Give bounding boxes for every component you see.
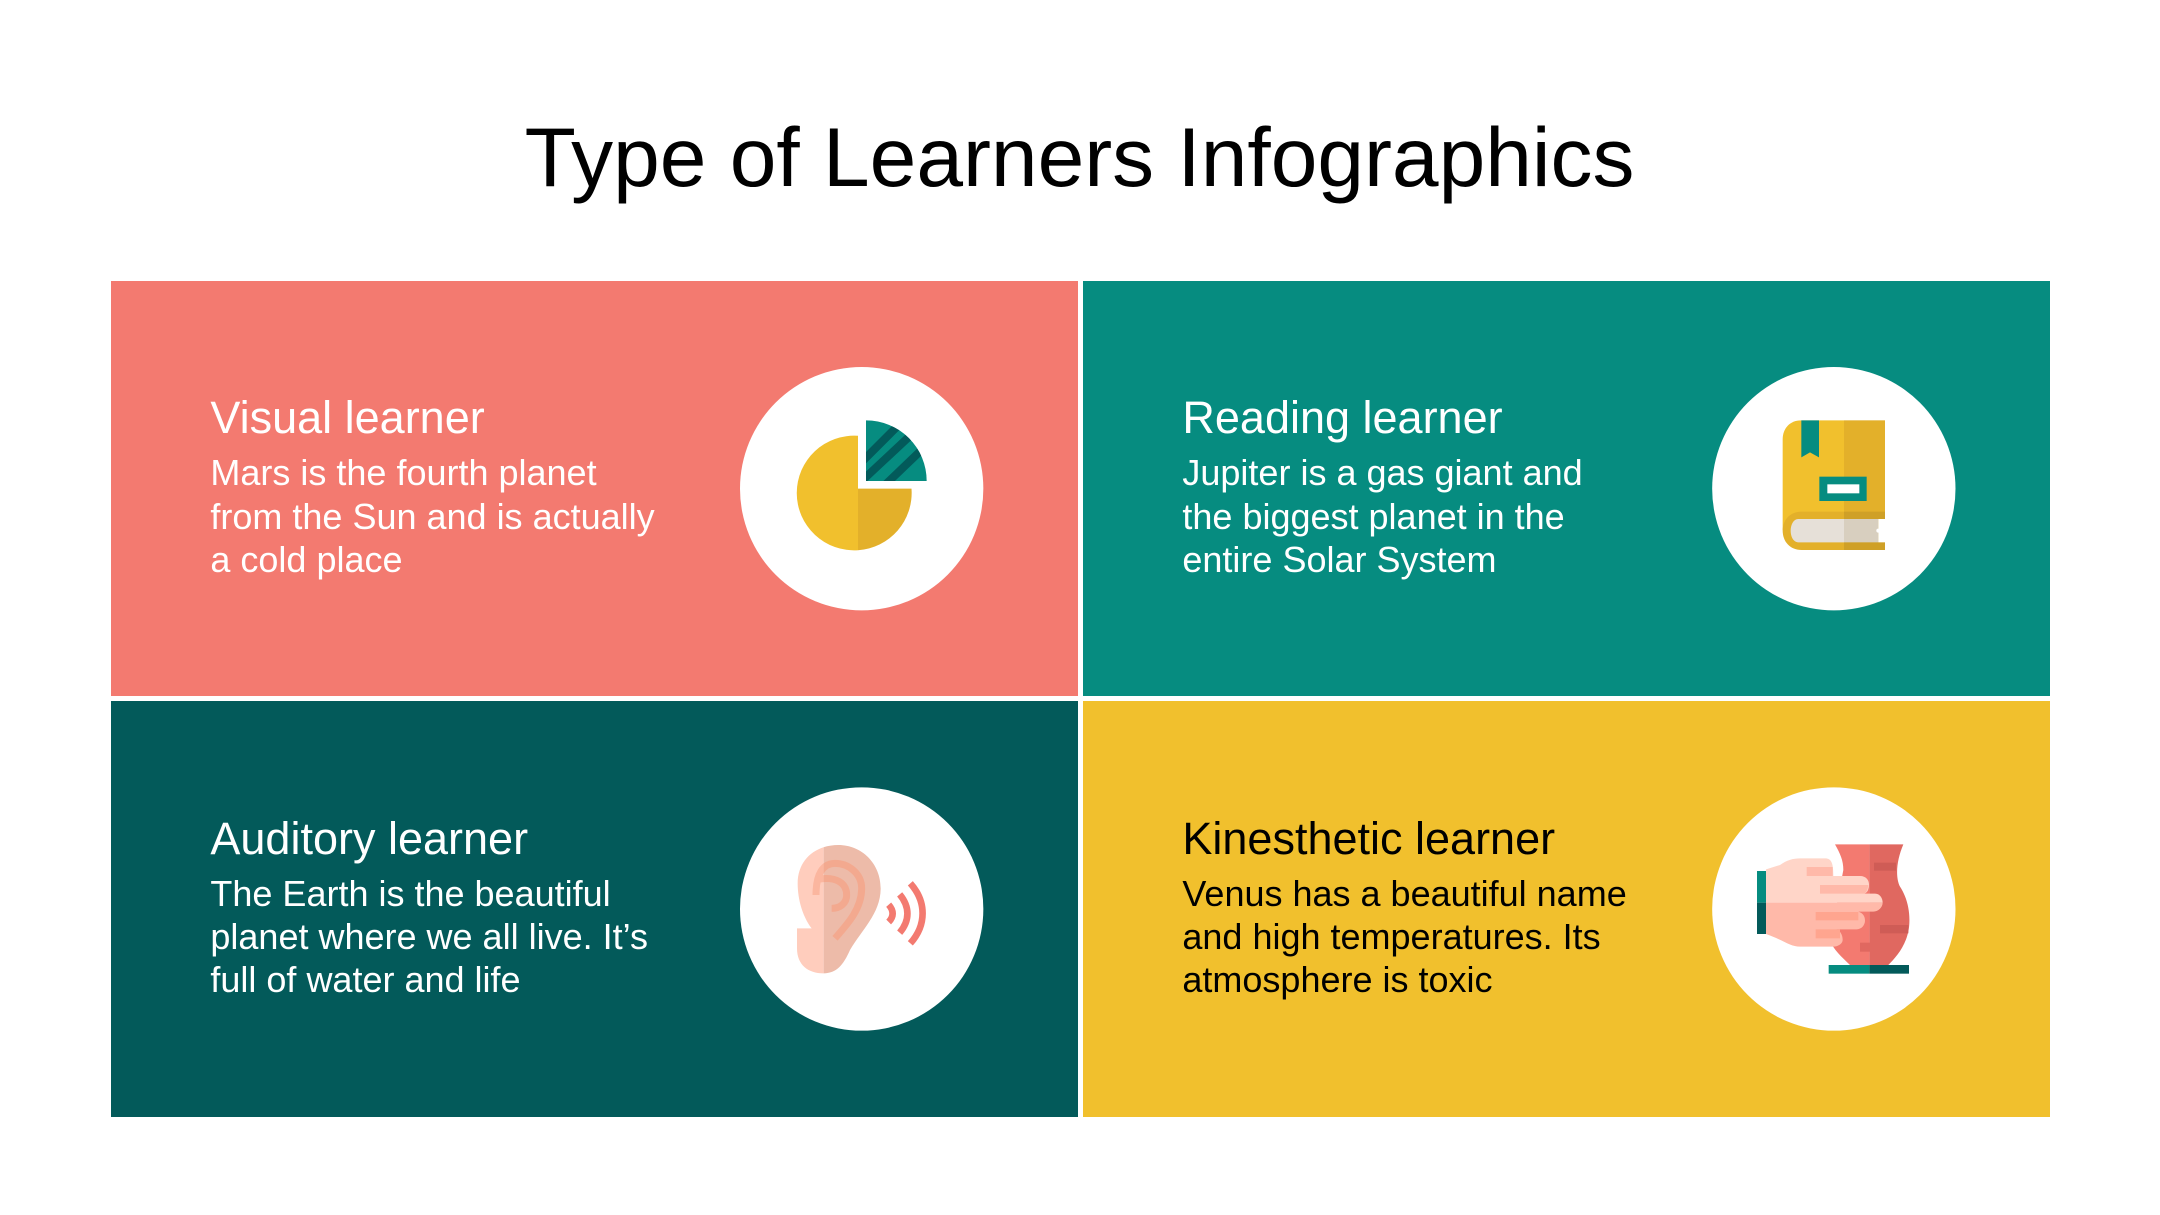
heading: reading learner: Reading learner xyxy=(1182,392,1503,443)
text: visual learner description: a cold place xyxy=(210,539,403,580)
icon: pie chart xyxy=(740,367,984,610)
text: visual learner description xyxy=(210,452,655,580)
panel: auditory learner xyxy=(111,701,1078,1117)
text: visual learner description: from the Sun and is actually xyxy=(210,496,655,537)
icon: hand shaping a clay vase xyxy=(1712,787,1956,1031)
text: kinesthetic learner description: and high temperatures. Its xyxy=(1182,916,1601,957)
text: visual learner description: Mars is the fourth planet xyxy=(210,452,597,493)
text: kinesthetic learner description: Venus has a beautiful name xyxy=(1182,873,1627,914)
heading: kinesthetic learner: Kinesthetic learner xyxy=(1182,813,1555,864)
title: Type of Learners Infographics xyxy=(525,110,1634,204)
panel: visual learner xyxy=(111,281,1078,696)
heading: auditory learner: Auditory learner xyxy=(210,813,528,864)
text: kinesthetic learner description xyxy=(1182,873,1627,1000)
text: auditory learner description: full of water and life xyxy=(210,959,521,1000)
panel: kinesthetic learner xyxy=(1083,701,2050,1117)
text: reading learner description: the biggest planet in the xyxy=(1182,496,1565,537)
text: reading learner description xyxy=(1182,452,1583,580)
icon: book xyxy=(1712,367,1956,610)
icon: ear with sound waves xyxy=(740,787,984,1031)
heading: visual learner: Visual learner xyxy=(210,392,485,443)
text: auditory learner description xyxy=(210,873,648,1000)
text: reading learner description: Jupiter is a gas giant and xyxy=(1182,452,1583,493)
text: auditory learner description: planet where we all live. It’s xyxy=(210,916,648,957)
text: reading learner description: entire Solar System xyxy=(1182,539,1497,580)
text: kinesthetic learner description: atmosphere is toxic xyxy=(1182,959,1493,1000)
panel: reading learner xyxy=(1083,281,2050,696)
text: auditory learner description: The Earth is the beautiful xyxy=(210,873,611,914)
